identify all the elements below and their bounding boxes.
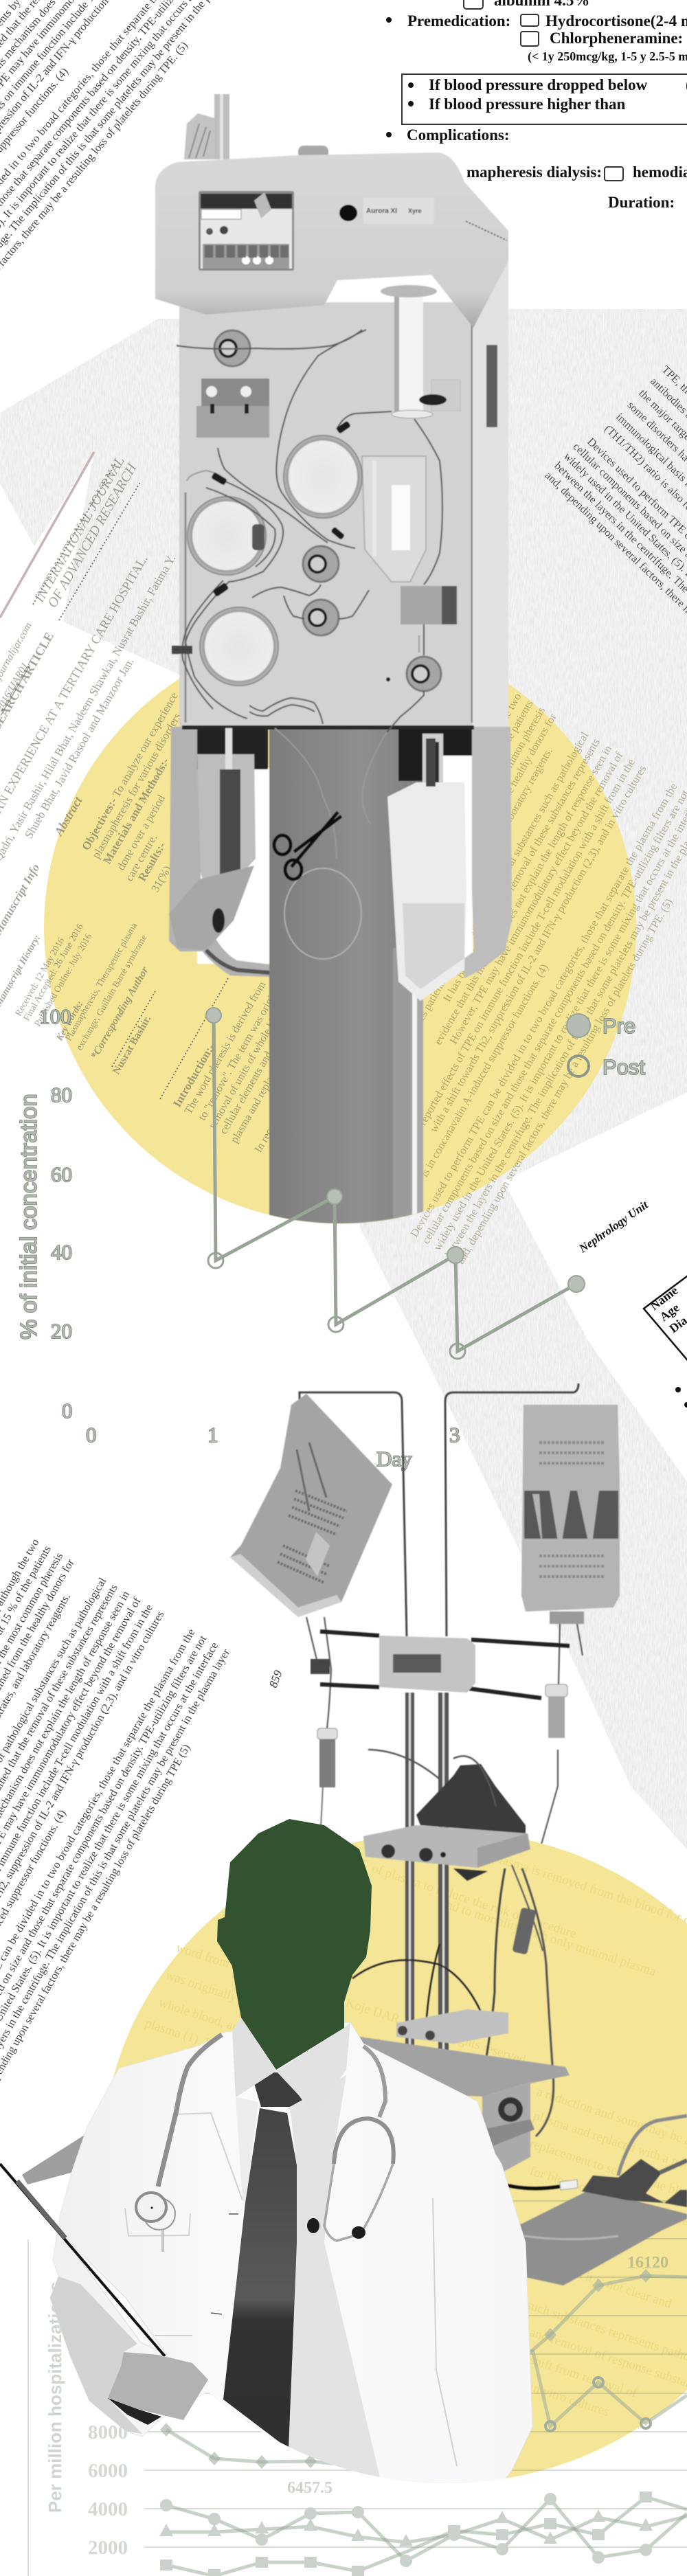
article text on yellow circle: and, depending upon several factors, there may be a resulting loss of platelets during TPE. (5)	[454, 896, 675, 1266]
device: base body	[482, 2081, 534, 2173]
article page header text: to "remove". The term was originally	[196, 975, 289, 1122]
machine: right leg and inner bay	[398, 727, 512, 978]
yellow circle lower	[103, 1831, 687, 2483]
article page header text: INTERNATIONAL JOURNAL	[32, 454, 128, 605]
article page header text: Materials and Methods:-	[100, 756, 172, 866]
device: upper poles	[405, 1693, 449, 2050]
article text on yellow circle: TPE improves patients by the removal of pathological substances such as pathological	[387, 730, 592, 1070]
article text on yellow circle: procedures. Plasma is obtained from the healthy donors for	[416, 711, 559, 947]
red rule on article page	[0, 452, 94, 618]
faint text on lower yellow circle: and to mortality, with only minimal plasma	[438, 1896, 658, 1979]
stand hooks	[300, 1383, 578, 1636]
chart legend	[567, 1014, 645, 1079]
line chart: percent of initial concentration	[16, 1004, 645, 1471]
article text on yellow circle	[251, 690, 687, 1266]
article page header text: done over a period	[114, 792, 168, 872]
chart post points	[208, 1253, 465, 1359]
article page header text: *Corresponding Author	[89, 964, 151, 1061]
rotated article text top left	[0, 0, 256, 369]
machine: panel frame line	[185, 323, 472, 723]
device: right knob tube	[660, 2160, 687, 2173]
doctor: stethoscope tube left	[158, 2035, 222, 2187]
article page header text: Received: 12 May 2016	[13, 936, 66, 1018]
article text on yellow circle: It has been assumed that the removal of these substances represents	[440, 736, 602, 1004]
chart hollow circle markers	[545, 2377, 651, 2431]
article page header text: Final Accepted: 26 June 2016	[21, 922, 85, 1022]
doctor: stethoscope tube right	[363, 2046, 385, 2117]
machine: rotor centres	[220, 340, 429, 682]
doctor: cuff shadow	[108, 2398, 161, 2425]
chart y axis label: % of initial concentration	[16, 1094, 41, 1340]
form text top right: Complications:	[407, 126, 510, 144]
chart y axis tick labels: 2000	[88, 2537, 128, 2559]
machine: drip chamber	[362, 456, 426, 582]
doctor: stethoscope ear tubes	[324, 2164, 393, 2241]
machine: top knob	[298, 146, 328, 158]
article text on yellow circle: However, TPE may have immunomodulatory effect beyond the removal of	[447, 749, 626, 1046]
article page header text: Results:-	[135, 840, 168, 883]
machine: sensor box	[401, 586, 457, 624]
faint text on lower yellow circle: was originally used for the procedure of whole	[164, 1968, 401, 2057]
form text top right: If blood pressure dropped below	[429, 76, 648, 93]
chart value labels: 6457.5	[287, 2479, 333, 2497]
faint text on lower yellow circle: in vitro cultures	[528, 2380, 611, 2419]
chart axis tick labels	[39, 1004, 460, 1471]
doctor: left arm piece	[22, 2135, 89, 2184]
machine: clamp box	[196, 379, 269, 438]
machine: front panel	[179, 302, 473, 727]
device: hose arc	[618, 2116, 687, 2176]
device: lower clamp	[396, 2009, 508, 2044]
patient details box	[644, 1274, 687, 1408]
chart triangle markers	[159, 2509, 653, 2546]
rotated article text lower left	[0, 1536, 244, 2112]
chart diamond markers	[160, 2269, 652, 2469]
article page header text: Shueb Bhat, Javid Rasool and Manzoor Jan.	[22, 655, 137, 841]
chart axis tick labels: 1	[207, 1423, 218, 1447]
doctor figure	[0, 1819, 532, 2514]
article page header text: plasma and replacement	[229, 1047, 292, 1145]
article page header text: plasmapheresis for various disorders	[89, 710, 183, 861]
device: pad highlight	[519, 2235, 618, 2239]
doctor: head silhouette	[217, 1819, 372, 2070]
chart legend: Post	[602, 1055, 645, 1079]
patient details box: Name	[647, 1283, 680, 1313]
patient details box: Age	[657, 1300, 682, 1324]
faint text on lower yellow circle: word from the Greek apheresis in Koje IJAR 2016, All rights reserved	[174, 1941, 528, 2068]
plasma bag right	[521, 1405, 620, 1624]
icon: forceps	[274, 812, 341, 879]
plasma bag left	[230, 1394, 392, 1617]
article text on yellow circle: Plasmapheresis may be done by centrifugal or membrane-based devices, although the two	[311, 691, 524, 1046]
device: cuff cable	[368, 1750, 496, 1807]
chart pre points	[206, 1008, 585, 1292]
machine: pump discs	[187, 435, 363, 686]
doctor: hand	[108, 2352, 208, 2420]
article text on yellow circle: transfusion, for culture substrates, and laboratory reagents.	[413, 745, 555, 979]
machine: power button	[339, 205, 357, 221]
article text on yellow circle: evidence that this mechanism does not explain the length of response seen in	[431, 743, 614, 1047]
article text on yellow circle: cellular components based on size and those that separate components based on density. TPE-utilizing filters are not	[419, 787, 687, 1246]
device: control unit	[363, 1825, 530, 1881]
article page header text: Introduction:-	[170, 1041, 217, 1109]
chart axis tick labels: 3	[449, 1423, 460, 1447]
chart y axis tick labels: 4000	[88, 2498, 128, 2520]
machine: base shadow strip	[182, 725, 474, 730]
lower apheresis device	[352, 1693, 687, 2285]
chart axis tick labels: 60	[51, 1162, 72, 1186]
machine: side slot	[486, 345, 497, 427]
article page header text: The word pheresis is derived from	[183, 980, 269, 1116]
chart axis tick labels: 80	[51, 1083, 72, 1107]
rotated article text top right	[543, 356, 687, 705]
doctor: coat pocket slits	[211, 2214, 238, 2314]
page number 859: 859	[267, 1668, 285, 1689]
article page header text: Key words:	[54, 999, 86, 1043]
doctor: grey sleeve	[50, 2276, 142, 2434]
faint text on lower yellow circle: whole blood, and the separated plasma	[157, 1996, 354, 2072]
article page header text: 31(%)	[148, 863, 174, 894]
form text top right: If blood pressure higher than	[429, 95, 625, 113]
device: shelf	[359, 2037, 570, 2097]
article page header text: cellular elements and reinfusion	[218, 1008, 298, 1136]
machine: side seam	[466, 221, 507, 240]
chart legend: Pre	[602, 1014, 635, 1038]
chart axis tick labels: 0	[86, 1423, 96, 1447]
machine: brand label: Aurora XI	[366, 207, 397, 215]
plasmapheresis machine	[155, 94, 512, 1228]
article page header text: Published Online: July 2016	[32, 931, 93, 1028]
doctor: coat	[50, 2022, 532, 2514]
doctor: coat lapel and pocket lines	[125, 2113, 457, 2466]
article page header text: exchange, Guillain Barré syndrome	[74, 933, 149, 1052]
article page header text: Plasmapheresis, Therapeutic plasma	[63, 920, 139, 1043]
form text top right: Duration:	[608, 194, 675, 211]
article page header text	[0, 454, 298, 1155]
chart axis tick labels: 100	[39, 1004, 71, 1028]
chart axis tick labels: 0	[62, 1399, 73, 1423]
article page header text: In recent	[253, 1115, 282, 1155]
article page header text: Objectives:- To analyze our experience	[79, 690, 181, 852]
nephrology unit heading: Nephrology Unit	[576, 1198, 651, 1256]
form text top right: Chlorpheneramine:	[550, 30, 683, 47]
article page header text: care centre.	[122, 832, 159, 883]
machine: head housing	[155, 152, 508, 328]
stand arms	[320, 1631, 570, 1698]
chart square markers	[160, 2492, 652, 2576]
machine: filter cylinder	[381, 285, 460, 418]
doctor: shirt	[289, 2075, 380, 2477]
article text on yellow circle: reported effects of TPE on immune function include T-cell modulation with a shift from in the	[416, 756, 638, 1127]
article text on yellow circle: who require apheresis and is one of the most common pheresis	[396, 705, 548, 954]
device: pressure cuff	[416, 1764, 526, 1833]
article page header text: Abstract	[52, 793, 85, 839]
device: filter assembly	[582, 2159, 687, 2207]
machine: right side panel	[473, 231, 508, 727]
yellow circle upper	[44, 631, 636, 1223]
machine: brand label: Xyre	[408, 207, 422, 214]
chart value labels	[287, 2254, 668, 2497]
doctor: stethoscope binaural	[334, 2119, 394, 2164]
doctor: shirt collar	[232, 2018, 350, 2099]
chart y axis tick labels	[88, 2421, 128, 2559]
chart axis tick labels: Day	[376, 1447, 412, 1471]
chart axis tick labels: 20	[51, 1319, 72, 1343]
faint text on lower yellow circle: shift from removal of	[528, 2353, 640, 2401]
machine: brand label	[363, 198, 434, 224]
article page header text: removal of units of whole blood	[207, 1002, 287, 1131]
article page header text: Nusrat Bashir.	[111, 1013, 153, 1076]
chart grid lines	[144, 2201, 687, 2547]
machine: centre column	[269, 727, 423, 1228]
chart y axis tick labels: 6000	[88, 2460, 128, 2482]
form text top right: Premedication:	[407, 12, 510, 30]
article text on yellow circle: is in concanavalin A-induced suppressor functions. (4)	[418, 962, 551, 1179]
chart lines	[214, 1015, 576, 1351]
doctor: tie	[223, 2072, 302, 2449]
machine: pole and top bag	[184, 94, 229, 159]
device: cables	[352, 1865, 554, 2136]
chart y axis tick labels: 8000	[88, 2421, 128, 2443]
doctor: stethoscope chest piece	[136, 2193, 175, 2252]
device: cable and connector	[504, 2180, 578, 2190]
machine: right white bag	[387, 738, 466, 1001]
IV stand with bags	[230, 1383, 620, 2101]
chart y axis label: Per million hospitalizations	[45, 2281, 65, 2513]
machine: left leg	[169, 727, 269, 977]
chart value labels: 16120	[627, 2254, 668, 2272]
chart series lines	[166, 2276, 687, 2576]
article text on yellow circle: with a shift towards Th2, suppression of IL-2 and IFN-γ production (2,3), and in vitro cultures	[427, 762, 649, 1134]
textured paper bands	[0, 309, 687, 1849]
doctor: shirt left sliver	[236, 2097, 258, 2203]
chart filled circle markers	[160, 2493, 652, 2567]
machine: left solution bag	[169, 728, 256, 950]
machine: small rotors	[214, 330, 441, 691]
form text top right	[386, 0, 687, 211]
faint text on lower yellow circle: of plasma to reduce the risk of procedure	[370, 1862, 578, 1941]
form text top right: mapheresis dialysis:	[466, 163, 602, 181]
drip chambers	[317, 1684, 567, 1827]
device: filter pad	[514, 2189, 687, 2285]
line chart: per million hospitalizations	[28, 2201, 687, 2576]
faint text on lower yellow circle	[143, 1844, 687, 2419]
faint text on lower yellow circle: plasma (1). In recent years it has been used	[143, 2016, 362, 2099]
article text on yellow circle: techniques have similar efficacy. It is used in about 15 % of the patients	[364, 698, 536, 982]
faint text on lower yellow circle: in the blood it is not clear and	[521, 2250, 674, 2312]
bag tubes	[306, 1617, 583, 2101]
article page header text: OF ADVANCED RESEARCH	[45, 460, 140, 610]
machine: tubing	[172, 330, 442, 859]
machine: display screen	[199, 191, 294, 271]
stand control box	[379, 1636, 475, 1693]
chart axis line	[27, 2239, 29, 2576]
doctor: clipboard	[0, 2164, 167, 2356]
article text on yellow circle: Devices used to perform TPE can be divided in to two broad categories, those that separate the plasma from the	[407, 780, 679, 1239]
chart axis tick labels: 40	[51, 1240, 72, 1264]
doctor: stethoscope ear tips	[307, 2218, 365, 2239]
